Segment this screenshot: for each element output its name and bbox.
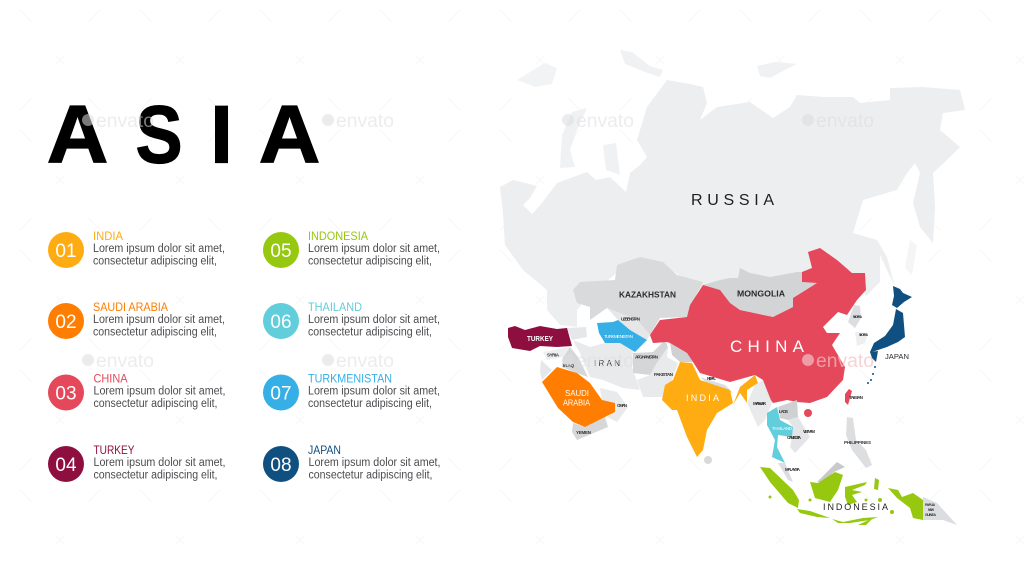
map labels: IRAQ (563, 363, 574, 368)
legend item 07 Turkmenistan: 07 (270, 384, 292, 404)
legend item 04 Turkey (48, 443, 226, 482)
map labels: IRAN (594, 359, 620, 368)
map labels: TAIWAN (849, 395, 863, 400)
legend (48, 229, 440, 482)
Indonesia (760, 467, 923, 525)
legend item 03 China: CHINA (94, 372, 128, 386)
watermarks: envato (336, 351, 394, 372)
map labels: INDIA (686, 393, 719, 403)
legend item 08 Japan: 08 (270, 455, 292, 476)
map labels: SYRIA (547, 352, 560, 358)
map labels: PAKISTAN (654, 372, 673, 377)
Mongolia (703, 268, 817, 317)
legend item 01 India: 01 (55, 241, 77, 262)
legend item 07 Turkmenistan (263, 372, 440, 410)
map labels: TURKMENISTAN (604, 334, 633, 339)
map labels: MONGOLIA (737, 288, 785, 298)
map labels: GUINEA (925, 513, 936, 517)
legend item 06 Thailand (263, 300, 440, 339)
map labels: AFGHANISTAN (635, 354, 658, 360)
map labels: S. KOREA (859, 333, 868, 337)
map labels: PHILIPPINES (844, 440, 871, 445)
legend item 05 Indonesia: 05 (270, 241, 292, 262)
legend item 02 Saudi Arabia (48, 300, 225, 339)
title: A (47, 88, 108, 180)
map labels: TURKEY (527, 336, 553, 343)
map labels: THAILAND (772, 426, 793, 431)
Russia (500, 50, 965, 327)
map labels: KAZAKHSTAN (619, 290, 676, 300)
legend item 03 China (48, 372, 226, 410)
watermarks: envato (96, 111, 154, 132)
legend item 02 Saudi Arabia: 02 (55, 312, 77, 333)
Turkmenistan (597, 320, 647, 352)
watermarks: envato (96, 351, 154, 372)
legend item 06 Thailand: Lorem ipsum dolor sit amet, (308, 314, 440, 326)
legend item 02 Saudi Arabia: Lorem ipsum dolor sit amet, (93, 314, 225, 326)
legend item 02 Saudi Arabia: consectetur adipiscing elit, (93, 326, 217, 338)
legend item 08 Japan: Lorem ipsum dolor sit amet, (308, 457, 440, 469)
watermarks: envato (576, 351, 634, 372)
legend item 03 China: Lorem ipsum dolor sit amet, (94, 386, 226, 398)
legend item 04 Turkey: TURKEY (94, 443, 134, 457)
title: A (259, 88, 320, 180)
legend item 01 India: INDIA (93, 229, 123, 243)
legend item 08 Japan: JAPAN (308, 443, 341, 457)
title: I (210, 90, 233, 180)
title: S (135, 90, 183, 181)
legend item 02 Saudi Arabia: SAUDI ARABIA (93, 300, 168, 314)
India (662, 362, 758, 457)
watermarks: envato (816, 111, 874, 132)
map labels: RUSSIA (691, 192, 774, 209)
legend item 05 Indonesia (263, 229, 440, 268)
map labels: UZBEKISTAN (621, 316, 640, 322)
watermarks (82, 111, 874, 372)
Central Asia neighbours (567, 257, 703, 397)
legend item 04 Turkey: Lorem ipsum dolor sit amet, (94, 457, 226, 469)
Thailand (767, 407, 793, 463)
legend item 01 India (48, 229, 225, 268)
legend item 07 Turkmenistan: consectetur adipiscing elit, (308, 398, 432, 410)
South and Southeast neighbours (700, 305, 957, 525)
legend item 05 Indonesia: INDONESIA (308, 229, 368, 243)
legend item 05 Indonesia: consectetur adipiscing elit, (308, 256, 432, 268)
legend item 01 India: consectetur adipiscing elit, (93, 256, 217, 268)
legend item 08 Japan (263, 443, 440, 482)
map labels: JAPAN (885, 352, 909, 361)
legend item 06 Thailand: THAILAND (308, 300, 362, 314)
Japan (867, 286, 912, 384)
map of Asia (500, 50, 965, 525)
map labels: MYANMAR (753, 401, 767, 406)
map labels: PAPUA (925, 503, 935, 507)
Saudi Arabia (542, 367, 615, 427)
legend item 04 Turkey: consectetur adipiscing elit, (94, 470, 218, 482)
legend item 07 Turkmenistan: Lorem ipsum dolor sit amet, (308, 386, 440, 398)
watermarks: envato (816, 351, 874, 372)
title (47, 88, 320, 181)
legend item 08 Japan: consectetur adipiscing elit, (308, 470, 432, 482)
legend item 03 China: consectetur adipiscing elit, (94, 398, 218, 410)
map labels: N. KOREA (853, 315, 862, 319)
map labels (527, 192, 936, 517)
map labels: NEPAL (707, 376, 716, 381)
map labels: YEMEN (576, 430, 591, 435)
legend item 07 Turkmenistan: TURKMENISTAN (308, 372, 392, 386)
legend item 05 Indonesia: Lorem ipsum dolor sit amet, (308, 243, 440, 255)
legend item 06 Thailand: 06 (270, 312, 292, 333)
legend item 03 China: 03 (55, 384, 77, 404)
map labels: CAMBODIA (787, 435, 802, 440)
map labels: ARABIA (563, 398, 590, 408)
map labels: VIETNAM (803, 429, 815, 434)
legend item 01 India: Lorem ipsum dolor sit amet, (93, 243, 225, 255)
China (650, 248, 866, 417)
map labels: MALAYSIA (785, 467, 801, 472)
map labels: OMAN (617, 403, 627, 408)
legend item 04 Turkey: 04 (55, 455, 77, 476)
map labels: INDONESIA (823, 502, 888, 512)
Middle East neighbours (540, 347, 628, 440)
map labels: LAOS (779, 409, 788, 414)
map labels: SAUDI (565, 388, 589, 398)
map labels: CHINA (730, 337, 805, 356)
legend item 06 Thailand: consectetur adipiscing elit, (308, 326, 432, 338)
Turkey (508, 326, 572, 351)
watermarks: envato (336, 111, 394, 132)
watermarks: envato (576, 111, 634, 132)
map labels: NEW (928, 508, 935, 512)
